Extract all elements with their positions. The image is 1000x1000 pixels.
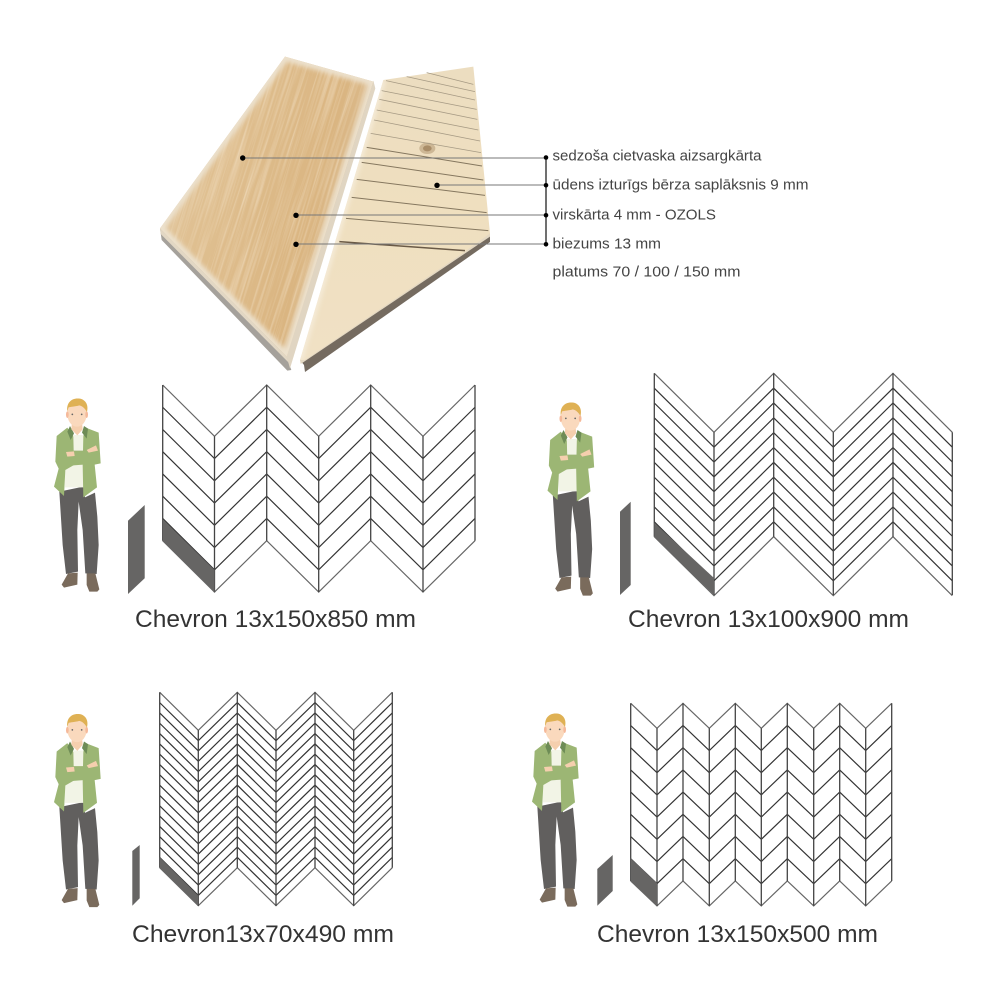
grooves — [339, 73, 488, 251]
caption: Chevron 13x150x500 mm — [597, 921, 878, 948]
figure: person for scale — [54, 714, 101, 907]
single plank — [128, 505, 145, 594]
panel: chevron 13x150x850 — [54, 385, 475, 633]
panel: chevron 13x150x500 — [532, 703, 892, 948]
knot — [419, 143, 435, 154]
chevron pattern — [654, 373, 952, 596]
caption: Chevron13x70x490 mm — [132, 921, 394, 948]
callouts: leader lines and dots — [240, 155, 548, 247]
plank: birch plywood underside with grooves — [300, 67, 490, 372]
spec labels — [552, 149, 808, 281]
figure: person for scale — [54, 398, 101, 592]
spec labels: platums 70 / 100 / 150 mm — [552, 265, 740, 281]
single plank — [132, 845, 140, 906]
caption: Chevron 13x100x900 mm — [628, 606, 909, 633]
figure: person for scale — [547, 402, 594, 596]
panel: chevron 13x70x490 — [54, 692, 394, 948]
figure: person for scale — [532, 713, 579, 907]
panel: chevron 13x100x900 — [547, 373, 952, 633]
spec labels: virskārta 4 mm - OZOLS — [552, 207, 716, 223]
chevron pattern — [631, 703, 892, 906]
chevron pattern — [160, 692, 392, 906]
single plank — [597, 855, 613, 906]
plank: oak top surface — [160, 56, 376, 371]
single plank — [620, 502, 631, 595]
caption: Chevron 13x150x850 mm — [135, 606, 416, 633]
spec labels: biezums 13 mm — [552, 236, 661, 252]
spec labels: sedzoša cietvaska aizsargkārta — [552, 149, 762, 165]
spec labels: ūdens izturīgs bērza saplāksnis 9 mm — [552, 178, 808, 194]
photo: two cut-away flooring planks — [160, 56, 490, 372]
chevron pattern — [163, 385, 475, 592]
